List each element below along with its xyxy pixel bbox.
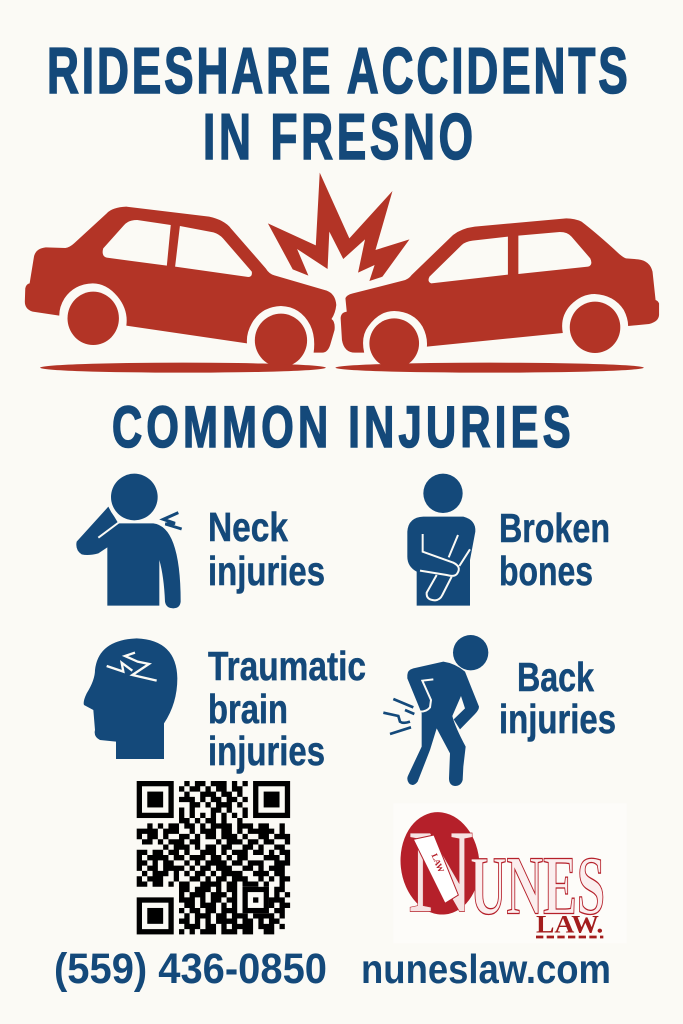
illustration: two cars colliding: [25, 173, 659, 373]
left car: [25, 207, 336, 373]
label: back injuries: [499, 654, 616, 742]
contact: website: nuneslaw.com: [361, 946, 611, 992]
logo: Nunes Law: LAW: [429, 852, 447, 874]
label: traumatic brain injuries: brain: [208, 686, 288, 732]
icon: impact burst: [268, 173, 409, 281]
label: back injuries: injuries: [499, 696, 616, 742]
heading: common injuries: COMMON INJURIES: [112, 394, 571, 460]
logo: Nunes Law: [393, 803, 627, 943]
title: RIDESHARE ACCIDENTS: [47, 35, 628, 107]
icon: head with brain injury: [84, 638, 177, 759]
title: [47, 35, 628, 173]
icon: neck injury person: [76, 474, 182, 608]
logo: Nunes Law: N: [408, 805, 473, 938]
label: neck injuries: [208, 504, 325, 594]
label: traumatic brain injuries: [208, 643, 366, 774]
icon: broken bones person: [407, 474, 475, 606]
label: neck injuries: Neck: [208, 504, 288, 550]
label: broken bones: bones: [499, 548, 593, 594]
QR code: [137, 784, 290, 932]
logo: Nunes Law: LAW.: [536, 911, 603, 939]
label: neck injuries: injuries: [208, 548, 325, 594]
icon: back injury person: [383, 635, 488, 786]
label: back injuries: Back: [517, 654, 594, 700]
label: traumatic brain injuries: Traumatic: [208, 643, 366, 689]
right car: [335, 218, 659, 373]
label: broken bones: [499, 505, 610, 594]
label: broken bones: Broken: [499, 505, 610, 551]
contact: phone number: (559) 436-0850: [54, 945, 327, 993]
title: IN FRESNO: [203, 101, 473, 173]
label: traumatic brain injuries: injuries: [208, 728, 325, 774]
